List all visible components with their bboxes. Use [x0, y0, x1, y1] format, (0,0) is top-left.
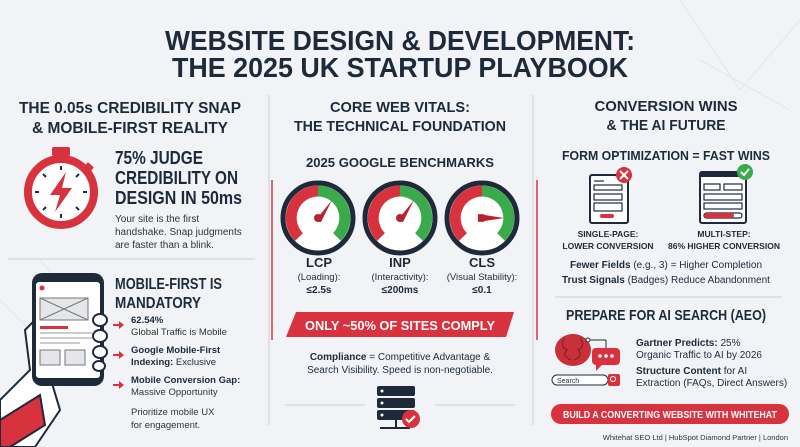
stat: 75% judge credibility: DESIGN IN 50ms [115, 188, 242, 208]
form labels: MULTI-STEP: [697, 229, 751, 239]
AEO heading: PREPARE FOR AI SEARCH (AEO) [566, 307, 766, 324]
middle heading: THE TECHNICAL FOUNDATION [294, 118, 506, 135]
stat: 75% judge credibility: are faster than a blink. [115, 240, 214, 251]
compliance text: Compliance = Competitive Advantage & [310, 352, 491, 363]
title: WEBSITE DESIGN & DEVELOPMENT: [165, 25, 635, 56]
form labels: 86% HIGHER CONVERSION [668, 241, 780, 251]
title [165, 25, 635, 83]
compliance text: Search Visibility. Speed is non-negotiable. [307, 365, 493, 376]
right heading: & THE AI FUTURE [606, 117, 726, 134]
CTA button: BUILD A CONVERTING WEBSITE WITH WHITEHAT [563, 410, 777, 421]
banner: only 50% comply [286, 312, 514, 337]
mobile-first text: Indexing: Exclusive [131, 357, 216, 368]
stat: 75% judge credibility: 75% JUDGE [115, 148, 203, 168]
mobile-first text: for engagement. [131, 420, 200, 431]
icon: stopwatch [28, 147, 94, 225]
gauge labels: (Loading): [298, 272, 340, 283]
mobile-first text: MOBILE-FIRST IS [115, 276, 222, 293]
icon: single-page form [590, 167, 632, 223]
gauge labels: CLS [469, 255, 495, 270]
form labels: SINGLE-PAGE: [578, 229, 639, 239]
middle heading: 2025 GOOGLE BENCHMARKS [306, 155, 494, 170]
gauge labels: INP [389, 255, 411, 270]
icon: server [377, 386, 420, 428]
right heading [562, 98, 770, 163]
middle heading [294, 99, 506, 170]
AEO text [636, 338, 787, 389]
middle heading: CORE WEB VITALS: [330, 99, 470, 116]
mobile-first text [113, 276, 240, 431]
mobile-first text: Google Mobile-First [131, 345, 221, 356]
gauge labels [298, 255, 517, 296]
stat: 75% judge credibility: Your site is the first [115, 214, 199, 225]
banner: only 50% comply: ONLY ~50% OF SITES COMPLY [305, 318, 495, 333]
column dividers [8, 95, 782, 425]
AEO text: Gartner Predicts: 25% [636, 338, 741, 349]
gauge labels: (Visual Stability): [447, 272, 517, 283]
gauge labels: LCP [306, 255, 332, 270]
right heading: FORM OPTIMIZATION = FAST WINS [562, 148, 770, 163]
left heading [19, 100, 241, 137]
gauge labels: ≤0.1 [472, 285, 492, 296]
form tips: Fewer Fields (e.g., 3) = Higher Completion [570, 260, 762, 271]
title: THE 2025 UK STARTUP PLAYBOOK [172, 52, 628, 83]
form tips: Trust Signals (Badges) Reduce Abandonment [562, 275, 770, 286]
mobile-first text: MANDATORY [115, 295, 201, 312]
right heading: CONVERSION WINS [594, 98, 738, 115]
icon: AI brain and search [552, 334, 620, 386]
compliance text [307, 352, 493, 376]
left heading: & MOBILE-FIRST REALITY [32, 120, 228, 137]
stat: 75% judge credibility: CREDIBILITY ON [115, 168, 238, 188]
form tips [562, 260, 770, 286]
left heading: THE 0.05s CREDIBILITY SNAP [19, 100, 241, 117]
mobile-first text: Prioritize mobile UX [131, 407, 215, 418]
form labels [562, 229, 780, 251]
footer: Whitehat SEO Ltd | HubSpot Diamond Partner | London [603, 433, 788, 442]
AEO text: Extraction (FAQs, Direct Answers) [636, 378, 787, 389]
AEO text: Organic Traffic to AI by 2026 [636, 350, 762, 361]
AEO text: Structure Content for AI [636, 366, 747, 377]
icon: multi-step form [700, 164, 753, 223]
gauge labels: (Interactivity): [371, 272, 429, 283]
gauge labels: ≤200ms [382, 285, 419, 296]
mobile-first text: 62.54% [131, 315, 164, 326]
icon: AI brain and search: Search [557, 378, 579, 385]
stat: 75% judge credibility [115, 148, 242, 251]
gauge labels: ≤2.5s [307, 285, 332, 296]
CTA button [551, 404, 789, 424]
gauges [283, 183, 517, 253]
mobile-first text: Mobile Conversion Gap: [131, 375, 240, 386]
form labels: LOWER CONVERSION [562, 241, 654, 251]
mobile-first text: Global Traffic is Mobile [131, 327, 227, 338]
stat: 75% judge credibility: handshake. Snap judgments [115, 227, 242, 238]
mobile-first text: Massive Opportunity [131, 387, 218, 398]
icon: hand holding phone [0, 273, 107, 447]
